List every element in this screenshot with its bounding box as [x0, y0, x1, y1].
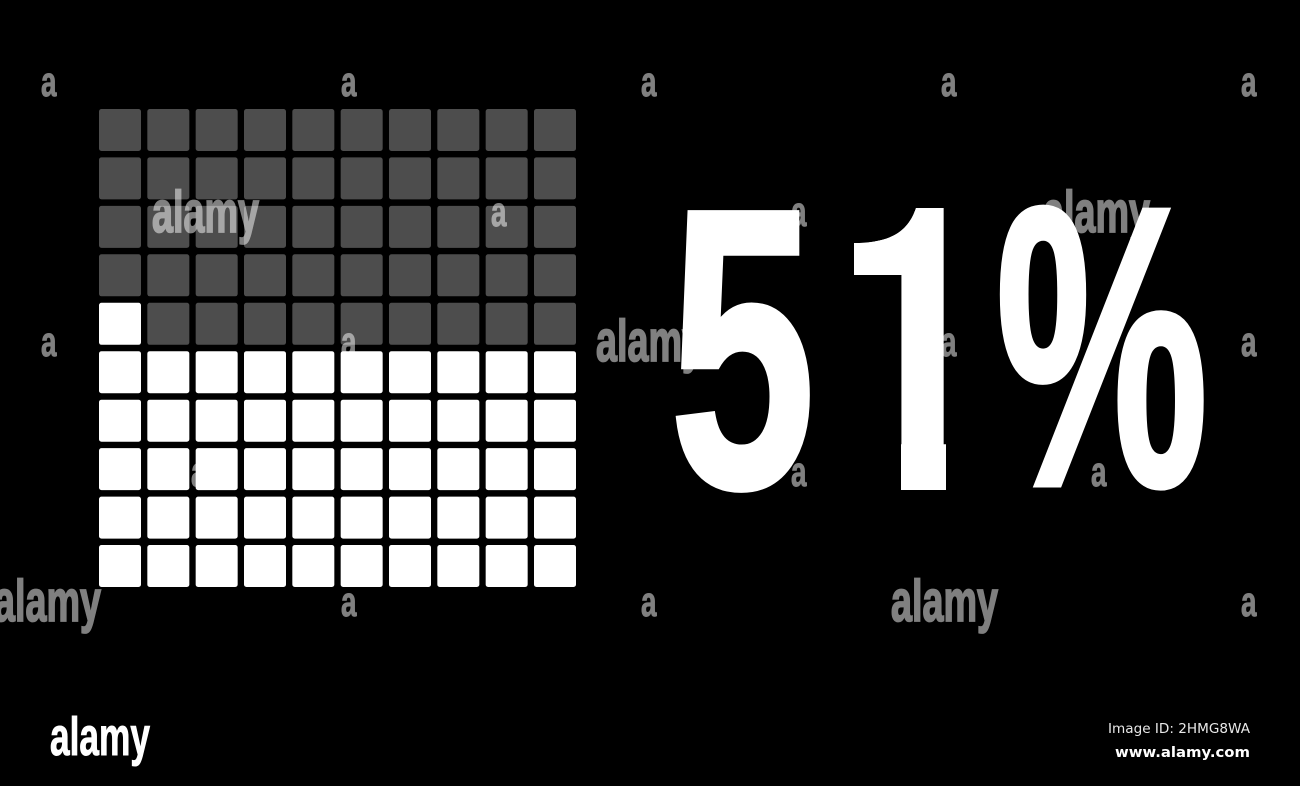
watermark: alamy words and small a marks: a [341, 58, 357, 105]
watermark: alamy words and small a marks: a [41, 58, 57, 105]
watermark: alamy words and small a marks: a [1241, 318, 1257, 365]
unfilled squares [99, 109, 576, 345]
watermark: alamy words and small a marks: a [341, 318, 357, 365]
watermark: alamy words and small a marks: alamy [596, 309, 703, 374]
watermark: alamy words and small a marks: a [791, 188, 807, 235]
alamy logo: alamy [50, 707, 150, 767]
watermark: alamy words and small a marks: alamy [891, 569, 998, 634]
watermark: alamy words and small a marks: alamy [152, 180, 259, 245]
watermark: alamy words and small a marks: a [941, 58, 957, 105]
watermark: alamy words and small a marks: a [41, 318, 57, 365]
watermark: alamy words and small a marks: a [1091, 448, 1107, 495]
big percentage figure [676, 204, 1204, 493]
watermark: alamy words and small a marks: alamy [1043, 180, 1150, 245]
watermark: alamy words and small a marks: a [191, 448, 207, 495]
watermark: alamy words and small a marks: a [341, 578, 357, 625]
watermark: alamy words and small a marks: a [641, 58, 657, 105]
digit 5: 5 [670, 128, 816, 572]
watermark: alamy words and small a marks: a [491, 188, 507, 235]
digit 1: 1 [840, 123, 992, 575]
waffle chart: 51 of 100 squares filled [99, 109, 576, 587]
watermark: alamy words and small a marks: a [941, 318, 957, 365]
watermark: alamy words and small a marks: a [1241, 578, 1257, 625]
image id: Image ID: 2HMG8WA [1108, 722, 1250, 737]
digit 1 [854, 208, 946, 490]
watermark: alamy words and small a marks: a [791, 448, 807, 495]
watermark: alamy words and small a marks: a [641, 578, 657, 625]
watermark: alamy words and small a marks [0, 58, 1257, 634]
watermark: alamy words and small a marks: a [1241, 58, 1257, 105]
filled squares [99, 303, 576, 587]
website url: www.alamy.com [1115, 745, 1250, 761]
